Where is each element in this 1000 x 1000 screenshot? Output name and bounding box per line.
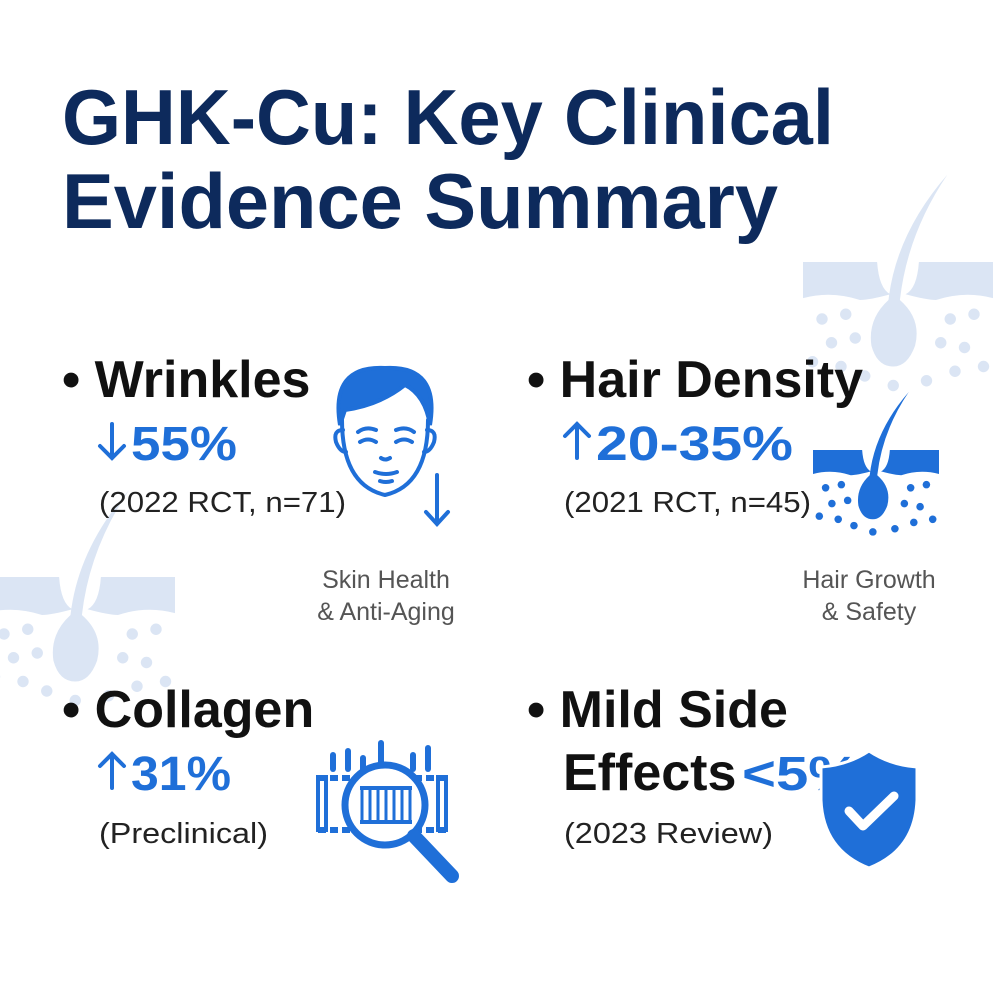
caption: skin health: & Anti-Aging [317,598,455,626]
source: side effects: (2023 Review) [564,818,773,850]
heading: hair density: • Hair Density [527,351,863,409]
caption: skin health [317,566,455,626]
panel: collagen [62,681,452,876]
source: wrinkles: (2022 RCT, n=71) [99,487,346,519]
title [62,73,834,245]
stat: hair density: 20-35% [596,418,793,471]
stat: wrinkles: 55% [131,418,237,471]
title: GHK-Cu: Key Clinical [62,73,834,161]
panel: hair density [527,351,939,626]
heading: mild side effects: • Mild Side [527,681,788,739]
caption: hair growth: & Safety [822,598,917,626]
caption: hair growth: Hair Growth [802,566,936,594]
icon: hair follicle [813,392,939,536]
heading: mild side effects: Effects [563,744,736,802]
heading: mild side effects: <5% [742,748,860,801]
heading: mild side effects [527,681,860,802]
caption: skin health: Skin Health [322,566,450,594]
title: Evidence Summary [62,157,778,245]
source: collagen: (Preclinical) [99,818,268,850]
icon: collagen magnifier [318,740,452,876]
background follicle top right [803,175,993,391]
panel: wrinkles [62,351,455,626]
background follicle left [0,490,175,706]
heading: collagen: • Collagen [62,681,314,739]
panel: side effects [527,681,917,868]
icon: face [335,368,448,524]
icon: shield check [821,751,917,868]
heading: wrinkles: • Wrinkles [62,351,310,409]
caption: hair growth [802,566,936,626]
stat: collagen: 31% [131,748,231,801]
source: hair density: (2021 RCT, n=45) [564,487,811,519]
